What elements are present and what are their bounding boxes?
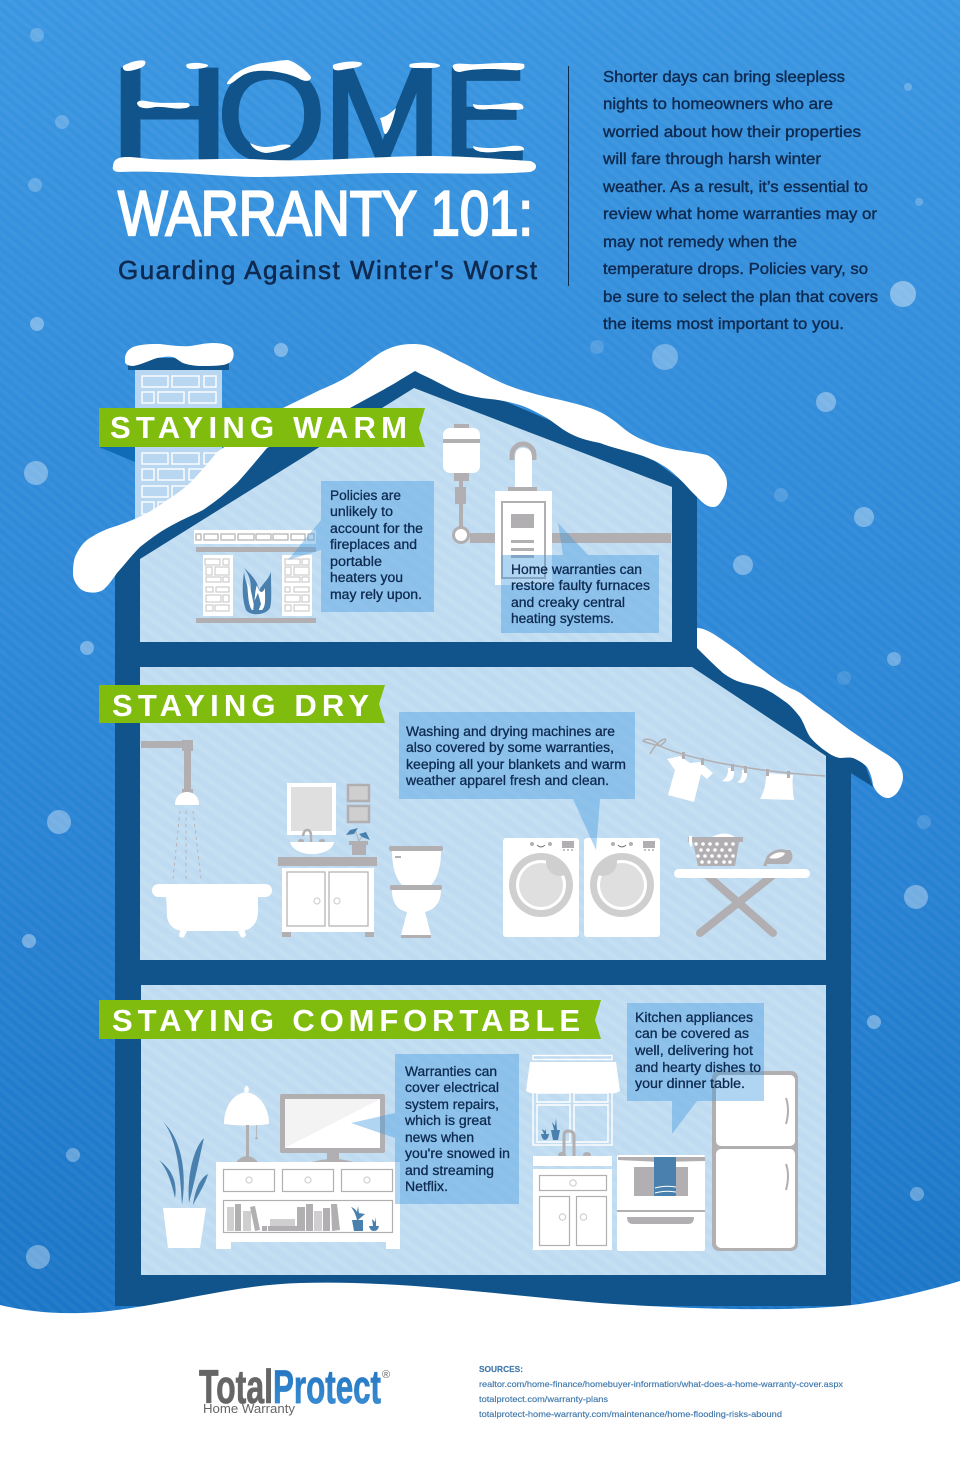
ironing board with basket and iron [674, 834, 810, 933]
banner: staying warm: STAYING WARM [110, 410, 407, 445]
ground snow [0, 1281, 960, 1473]
intro text: will fare through harsh winter [602, 151, 822, 168]
water heater and furnace [443, 424, 671, 585]
intro text: Shorter days can bring sleepless [603, 69, 845, 86]
logo: ® [382, 1369, 390, 1381]
callout: washing machines [399, 712, 635, 850]
callout: fireplaces: Policies are [330, 488, 401, 503]
intro text: nights to homeowners who are [603, 96, 833, 113]
callout: electrical: you're snowed in [405, 1146, 510, 1161]
house structure [115, 371, 873, 1306]
sources: totalprotect-home-warranty.com/maintenance/home-flooding-risks-abound [479, 1409, 782, 1419]
banner: staying comfortable: STAYING COMFORTABLE [112, 1003, 580, 1038]
callout: kitchen appliances: well, delivering hot [634, 1043, 753, 1058]
media console [216, 1162, 400, 1249]
callout: fireplaces: portable [330, 554, 382, 569]
callout: fireplaces: may rely upon. [330, 587, 422, 602]
callout: electrical: which is great [404, 1113, 491, 1128]
callout: washing machines: also covered by some warranties, [406, 740, 614, 755]
intro text: may not remedy when the [603, 234, 797, 251]
callout: fireplaces: account for the [330, 521, 423, 536]
refrigerator [712, 1071, 798, 1251]
callout: washing machines: weather apparel fresh and clean. [405, 773, 609, 788]
logo: Total [199, 1360, 273, 1413]
callout: furnaces: Home warranties can [511, 562, 642, 577]
kitchen sink and cabinet [533, 1131, 612, 1250]
roof snow [73, 344, 727, 593]
intro text: weather. As a result, it’s essential to [602, 179, 868, 196]
potted plant [159, 1122, 208, 1248]
callout: fireplaces: unlikely to [330, 504, 393, 519]
subtitle: Guarding Against Winter's Worst [118, 255, 538, 285]
callout: electrical: and streaming [405, 1163, 494, 1178]
callout: electrical: news when [405, 1130, 474, 1145]
callout: electrical: Netflix. [405, 1179, 448, 1194]
table lamp [224, 1086, 269, 1162]
vanity with mirror and sink [278, 783, 377, 937]
clothesline with laundry [643, 739, 825, 802]
intro text: the items most important to you. [603, 316, 844, 333]
callout: furnaces: and creaky central [511, 595, 625, 610]
callout: fireplaces: fireplaces and [330, 537, 417, 552]
stove [617, 1155, 705, 1251]
callout: kitchen appliances: your dinner table. [635, 1076, 745, 1091]
kitchen window and awning [526, 1056, 620, 1145]
title: HOME with snow: E [443, 41, 527, 189]
callout: furnaces: heating systems. [511, 611, 614, 626]
banner: staying warm [99, 408, 425, 462]
fireplace [194, 530, 316, 623]
logo: Protect [273, 1360, 381, 1413]
shower and bathtub [141, 740, 272, 938]
callout: kitchen appliances [627, 1003, 764, 1134]
callout: washing machines: keeping all your blankets and warm [406, 757, 626, 772]
logo [199, 1360, 390, 1416]
callout: washing machines: Washing and drying machines are [406, 724, 615, 739]
sources: SOURCES: [479, 1364, 523, 1374]
title: Warranty 101: WARRANTY 101: [118, 179, 533, 249]
intro text: review what home warranties may or [603, 206, 878, 223]
callout: kitchen appliances: Kitchen appliances [635, 1010, 753, 1025]
intro text [602, 69, 878, 333]
sources: totalprotect.com/warranty-plans [479, 1394, 608, 1404]
sources: realtor.com/home-finance/homebuyer-information/what-does-a-home-warranty-cover.aspx [479, 1379, 844, 1389]
callout: furnaces [501, 523, 659, 633]
television [280, 1094, 385, 1162]
sources [479, 1364, 844, 1419]
title: HOME with snow [109, 40, 536, 189]
logo: Home Warranty [203, 1401, 295, 1416]
lower roof snow [697, 628, 903, 798]
intro text: temperature drops. Policies vary, so [603, 261, 868, 278]
title: HOME with snow: H [109, 40, 230, 188]
title: HOME with snow: O [217, 41, 326, 188]
title: HOME with snow: M [323, 42, 442, 189]
callout: fireplaces: heaters you [330, 570, 403, 585]
callout: electrical: cover electrical [405, 1080, 499, 1095]
chimney [125, 343, 234, 540]
toilet [389, 846, 443, 938]
intro text: worried about how their properties [602, 124, 861, 141]
callout: furnaces: restore faulty furnaces [511, 578, 650, 593]
callout: electrical [351, 1054, 519, 1204]
callout: kitchen appliances: and hearty dishes to [635, 1060, 761, 1075]
intro text: be sure to select the plan that covers [603, 289, 878, 306]
banner: staying dry: STAYING DRY [112, 688, 369, 723]
callout: kitchen appliances: can be covered as [635, 1026, 749, 1041]
callout: electrical: system repairs, [405, 1097, 499, 1112]
washer and dryer [503, 838, 660, 937]
callout: fireplaces [288, 481, 434, 612]
callout: electrical: Warranties can [405, 1064, 497, 1079]
